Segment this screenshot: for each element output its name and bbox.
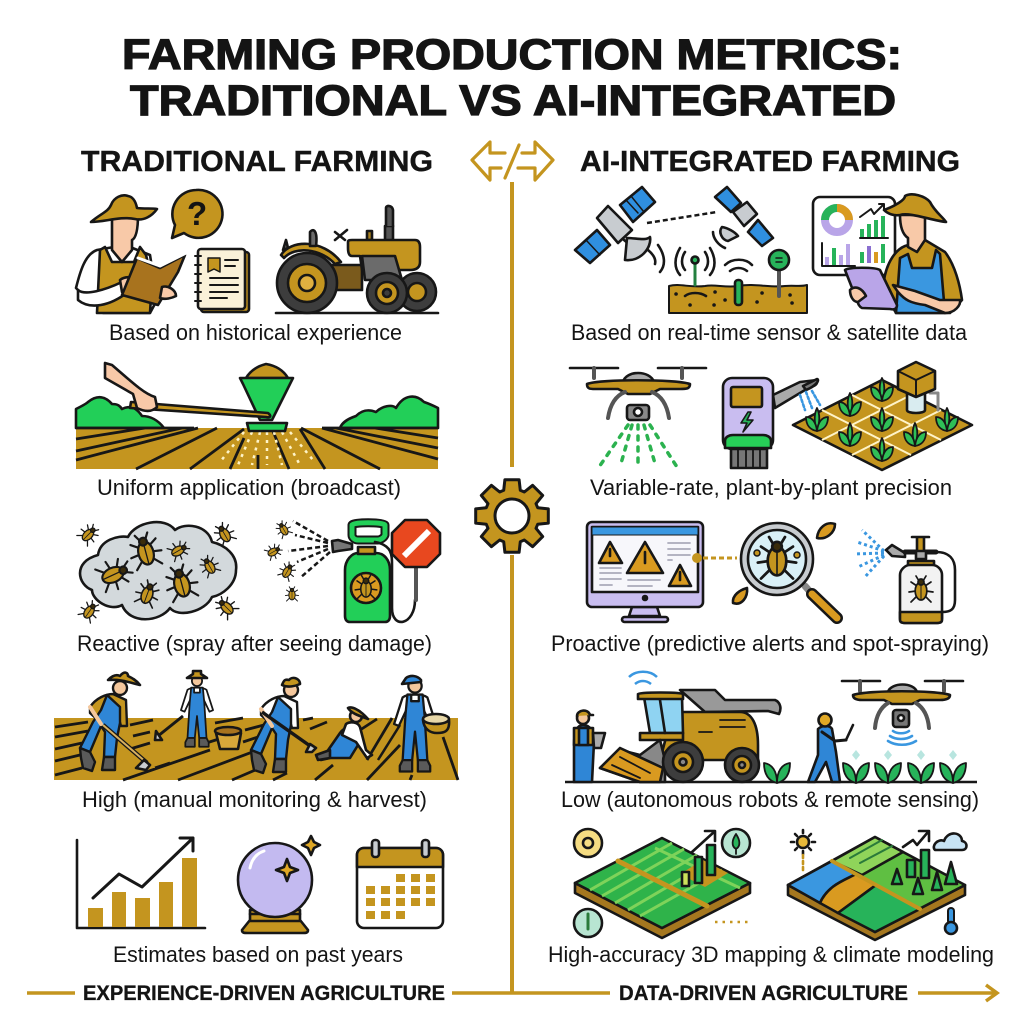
icon: farmer with tablet — [845, 194, 962, 313]
panel: row 4 AI, autonomous robots — [561, 672, 979, 812]
icon: compare arrows — [472, 142, 553, 180]
icon: calendar — [357, 840, 443, 928]
panel: row 1 traditional, historical experience — [76, 190, 438, 345]
icon: 3D field map one — [574, 829, 750, 938]
icon: soil with sensors — [669, 248, 807, 313]
worker three with hoe — [251, 678, 316, 773]
icon: magnifier with bug — [733, 523, 837, 618]
caption: Reactive (spray after seeing damage) — [77, 631, 432, 656]
spread seeds — [220, 432, 313, 465]
field — [54, 718, 458, 780]
icon: question bubble: ? — [187, 195, 207, 232]
dotted connector — [692, 553, 737, 563]
icon: spray bottle — [264, 519, 415, 622]
icon: drone — [842, 681, 963, 745]
icon: stop sign — [392, 520, 440, 600]
heading: traditional farming: TRADITIONAL FARMING — [81, 146, 433, 178]
caption: High (manual monitoring & harvest) — [82, 787, 427, 812]
worker one with hoe — [80, 673, 150, 771]
title — [122, 31, 902, 125]
icon: spot sprayer — [854, 530, 955, 623]
caption: Uniform application (broadcast) — [97, 475, 401, 500]
icon: crystal ball — [238, 836, 320, 933]
panel: row 5 traditional, estimates — [77, 836, 443, 967]
field — [76, 428, 438, 469]
heading: AI-integrated farming: AI-INTEGRATED FARMING — [580, 146, 960, 178]
center divider with gear — [476, 182, 548, 992]
icon: dashboard — [813, 197, 895, 275]
panel: row 3 AI, proactive — [551, 522, 989, 656]
icon: smart controller — [723, 378, 820, 468]
icon: autonomous harvester — [600, 690, 780, 782]
workers — [80, 671, 449, 773]
title: TRADITIONAL VS AI-INTEGRATED — [130, 77, 896, 125]
footer label left: EXPERIENCE-DRIVEN AGRICULTURE — [83, 982, 445, 1005]
icon: bar and line chart — [77, 838, 205, 928]
icon: green bushes — [76, 397, 438, 428]
panel: row 5 AI, 3D mapping — [548, 829, 994, 967]
icon: pest cloud — [76, 520, 240, 624]
icon: question bubble — [172, 190, 222, 238]
kneeling worker — [316, 707, 372, 760]
panel: row 1 AI, sensor and satellite data — [571, 187, 968, 345]
icon: satellite small — [713, 187, 773, 248]
icon: document — [195, 249, 249, 312]
operator — [808, 714, 853, 782]
footer banner — [27, 982, 997, 1005]
icon: isometric crop field — [793, 362, 972, 470]
dashed link — [647, 212, 717, 223]
panel: row 4 traditional, manual labour — [54, 671, 458, 812]
icon: wifi signal — [629, 672, 657, 684]
icon: 3D terrain map two — [788, 830, 966, 940]
icon: satellite large — [575, 187, 664, 272]
icon: drone with green spray — [570, 368, 706, 467]
caption: Based on real-time sensor & satellite data — [571, 320, 968, 345]
caption: Low (autonomous robots & remote sensing) — [561, 787, 979, 812]
icon: monitor with alerts — [587, 522, 703, 622]
worker with basket — [378, 676, 449, 772]
caption: Based on historical experience — [109, 320, 402, 345]
caption: High-accuracy 3D mapping & climate modeling — [548, 942, 994, 967]
plants row — [764, 750, 966, 783]
basket — [215, 727, 241, 749]
icon: spreader and hand — [105, 363, 293, 431]
worker with tablet — [574, 711, 605, 782]
panel: row 2 traditional, uniform application — [76, 363, 438, 500]
worker two with hoe — [155, 671, 213, 747]
panel: row 2 AI, variable-rate precision — [570, 362, 972, 500]
caption: Estimates based on past years — [113, 942, 403, 967]
icon: farmer with book — [76, 195, 186, 313]
icon: tractor — [276, 206, 438, 313]
dotted trail — [715, 921, 748, 923]
panel: row 3 traditional, reactive — [76, 519, 440, 656]
title: FARMING PRODUCTION METRICS: — [122, 31, 902, 79]
footer label right: DATA-DRIVEN AGRICULTURE — [619, 982, 908, 1005]
caption: Proactive (predictive alerts and spot-spraying) — [551, 631, 989, 656]
icon: gear — [476, 480, 548, 552]
caption: Variable-rate, plant-by-plant precision — [590, 475, 952, 500]
